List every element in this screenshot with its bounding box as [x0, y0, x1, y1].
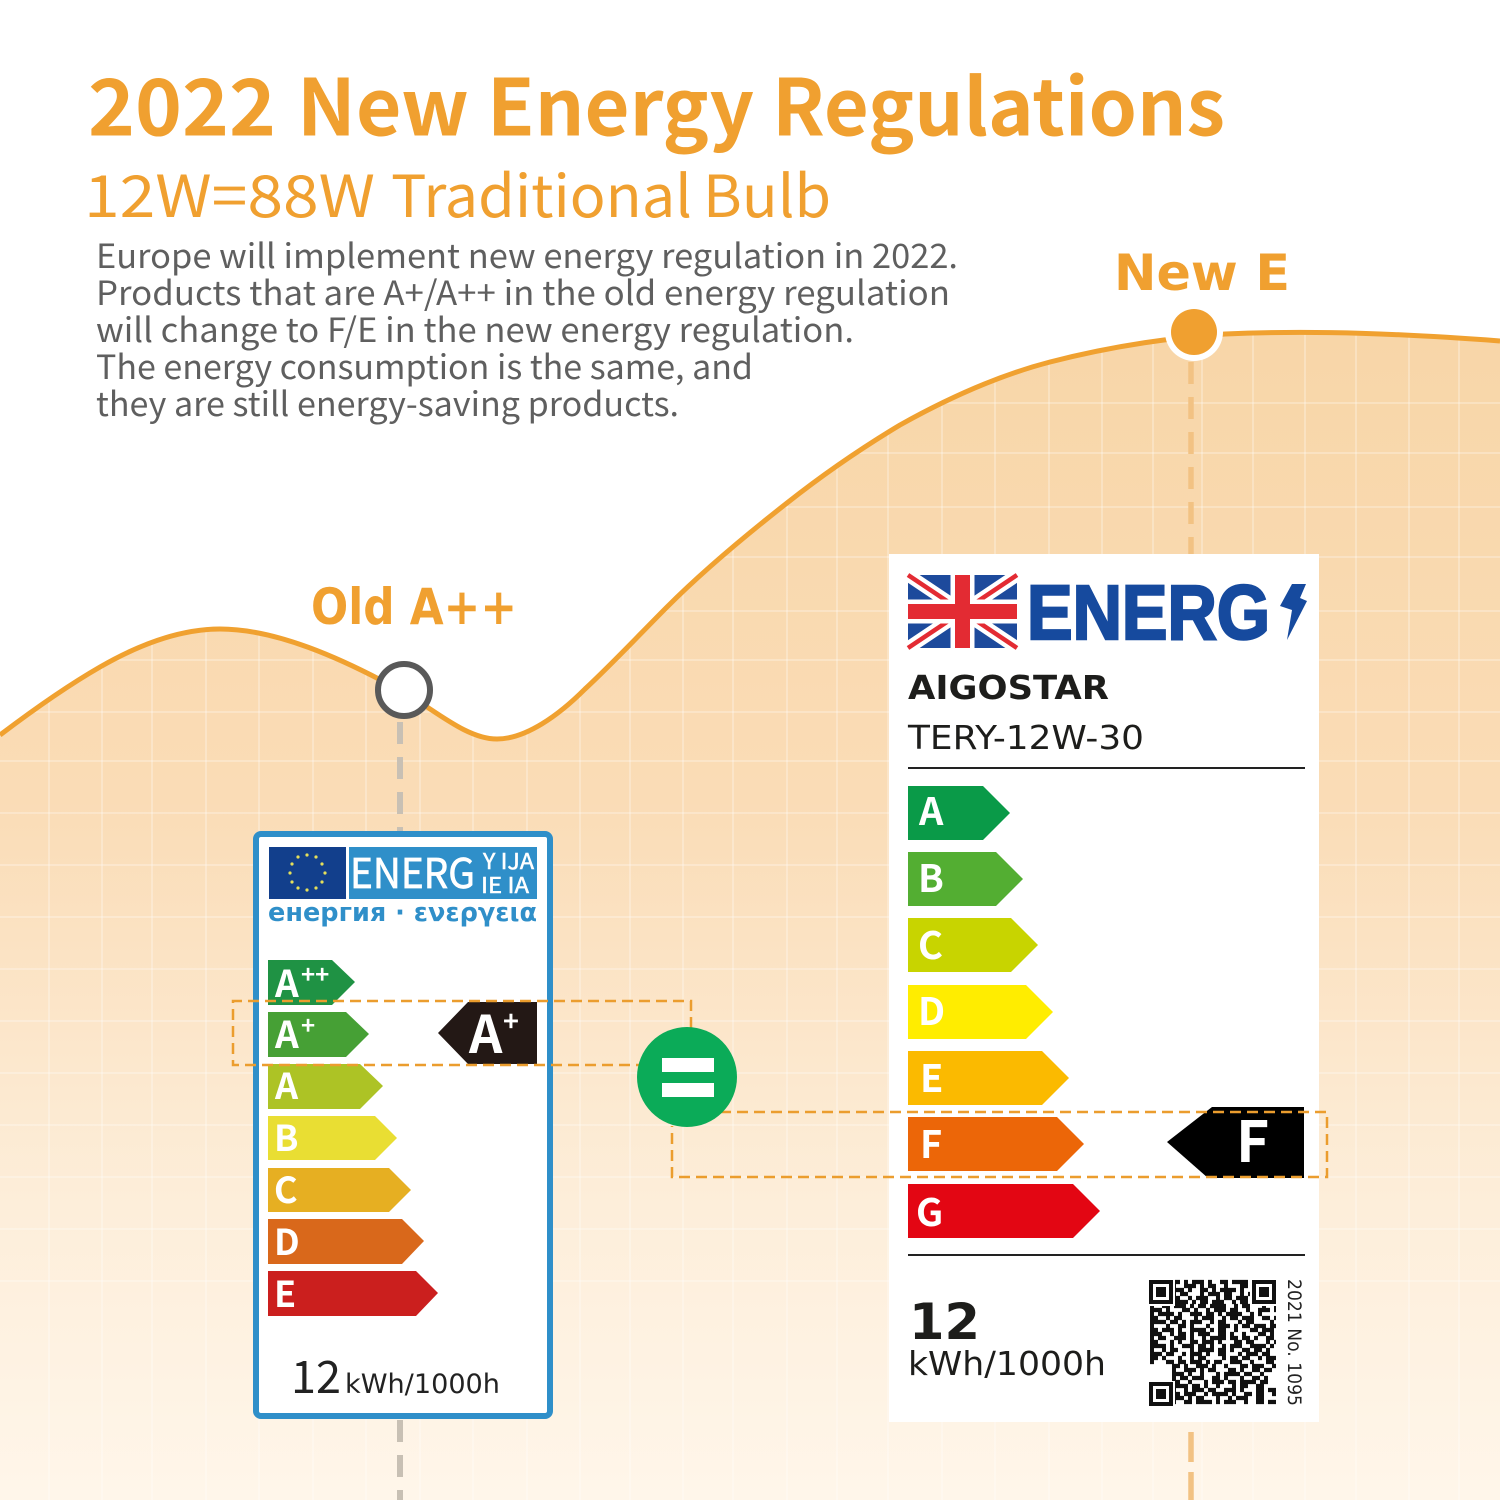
icon: UK flag [908, 575, 1017, 648]
subtitle: 12W=88W [84, 150, 375, 234]
label: Old A++: Old A++ [311, 578, 517, 636]
rating arrow: A+ [438, 993, 537, 1068]
energy scale: old: ++ [301, 955, 329, 990]
energy scale: old: C [274, 1162, 298, 1214]
consumption: new: 12 [909, 1293, 980, 1351]
description text: The energy consumption is the same, and [96, 340, 753, 389]
energy wordmark: ENERG [1027, 570, 1270, 656]
energy scale: new: C [918, 915, 943, 970]
energy scale: old: D [274, 1214, 300, 1266]
description text: Products that are A+/A++ in the old energy regulation [96, 266, 950, 315]
energy scale: new: E [920, 1048, 943, 1103]
energy banner: Y IJA [482, 844, 535, 876]
title [88, 46, 1225, 158]
energy scale: new: F [920, 1114, 942, 1169]
rating arrow: F [1167, 1097, 1304, 1179]
subtitle: Bulb [703, 150, 831, 234]
energy scale: new: A [918, 781, 944, 836]
panel: old energy label [256, 834, 550, 1416]
rating arrow: A+: A [468, 993, 503, 1068]
energy banner: IE IA [481, 868, 530, 900]
title: Regulations [772, 46, 1225, 158]
description text: Europe will implement new energy regulation in 2022. [96, 229, 958, 278]
title: 2022 [88, 46, 276, 158]
energy scale: old: + [301, 1006, 315, 1041]
consumption: old [291, 1341, 500, 1406]
icon: lightning bolt [1280, 584, 1307, 640]
energy scale: old: A [274, 1005, 299, 1059]
subtitle: Traditional [391, 150, 692, 234]
highlight box: new rating [672, 1112, 1327, 1177]
consumption: old: 12 [291, 1341, 341, 1406]
highlight box: old rating [233, 1001, 691, 1065]
icon: equals badge [637, 1027, 737, 1127]
label: New E: New E [1114, 244, 1290, 302]
title: Energy [487, 46, 754, 158]
title: New [297, 46, 469, 158]
background area under curve [0, 300, 1500, 1500]
description text [96, 229, 958, 426]
regulation number: 2021 No. 1095 [1283, 1279, 1305, 1406]
consumption: new: kWh/1000h [908, 1344, 1106, 1383]
consumption: new [908, 1293, 1106, 1383]
energy scale: old [268, 954, 438, 1318]
energy scale: old: B [274, 1110, 299, 1162]
subtitle [84, 150, 831, 234]
dashed connector: Old A++ [397, 722, 403, 1500]
energy scale: new: B [918, 848, 944, 903]
dashed connector: New E [1188, 362, 1194, 1500]
energy scale: old: A [274, 1058, 299, 1110]
rating arrow: F: F [1236, 1097, 1269, 1179]
model name: TERY-12W-30 [907, 718, 1144, 757]
energy scale: new [908, 781, 1100, 1238]
energy scale: old: A [274, 954, 299, 1008]
energy scale: new: D [918, 981, 945, 1036]
description text: will change to F/E in the new energy regulation. [96, 303, 854, 352]
marker: Old A++ ring [378, 664, 430, 716]
rating arrow: A+: + [503, 1000, 519, 1039]
panel: new energy label [889, 554, 1319, 1422]
energy scale: old: E [274, 1266, 296, 1318]
brand name: AIGOSTAR [908, 668, 1109, 707]
QR code [1148, 1278, 1277, 1407]
energy scale: new: G [916, 1182, 943, 1237]
icon: EU flag [269, 847, 346, 899]
multilingual word: енергия · ενεργεια [268, 898, 537, 928]
consumption: old: kWh/1000h [345, 1369, 500, 1400]
description text: they are still energy-saving products. [96, 377, 679, 426]
marker: New E dot [1165, 303, 1223, 361]
energy banner: ENERG [350, 840, 475, 900]
